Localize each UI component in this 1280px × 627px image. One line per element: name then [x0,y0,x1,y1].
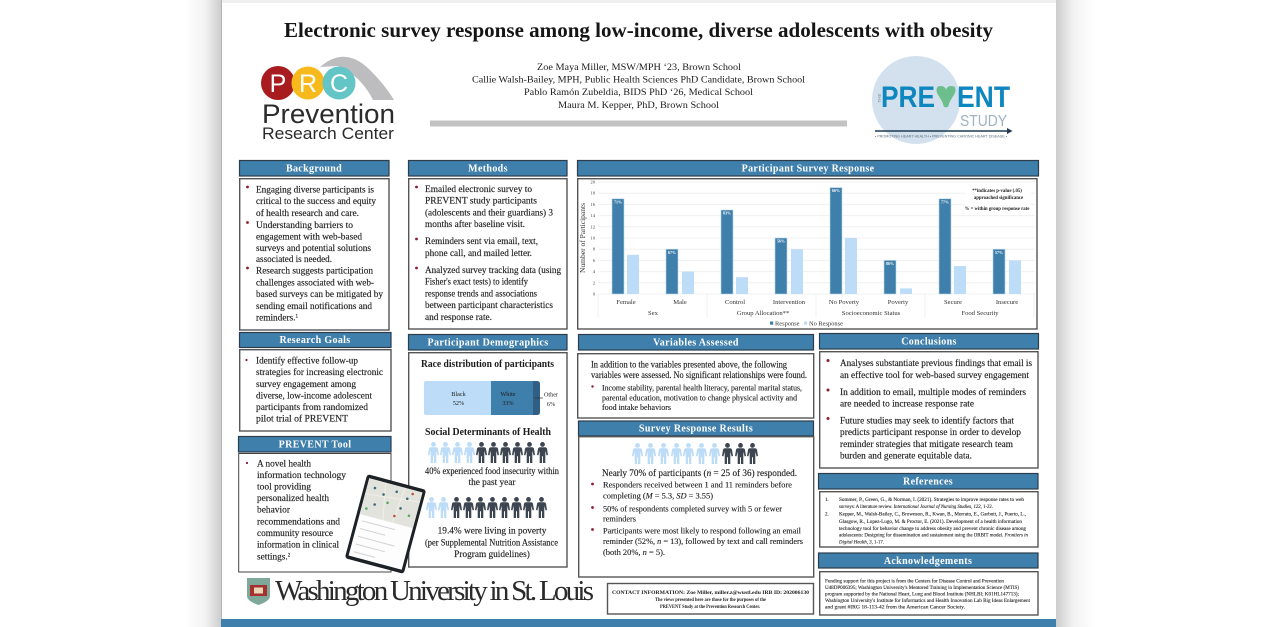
text block: methods bullets: phone call, and mailed letter. [425,249,532,259]
authors: Maura M. Kepper, PhD, Brown School [558,101,719,111]
list: results bullets: completing (M = 5.3, SD = 3.55) [603,490,713,500]
y axis: 4 [593,269,596,274]
legend: No Response [809,320,843,328]
divider bar [430,120,847,126]
text block: acknowledgements: U48DP006395; Washington University's Mentored Training in Implementation Science (MTIS) [825,586,1019,591]
statement: response rate: Nearly 70% of participants (n = 25 of 36) responded. [602,468,797,479]
text block: methods bullets: PREVENT study participants [425,196,537,206]
y axis: 18 [590,191,596,196]
text block: references: surveys: A literature review. International Journal of Nursing Studies, 122, 1-22. [839,505,993,510]
text block: methods bullets: between participant characteristics [425,301,553,311]
heading: variables assessed: Variables Assessed [653,338,739,348]
logo: Washington University in St. Louis: Washington University in St. Louis [275,575,594,607]
bars: response and no response [612,188,1021,294]
text block: PREVENT tool: community resource [257,529,333,539]
text block: background bullets: challenges associated with web- [256,278,374,288]
list: results bullets: reminder (52%, n = 13), followed by text and call reminders [603,536,804,546]
logo: PREVENT Study: V [937,81,955,114]
authors: Callie Walsh-Bailey, MPH, Public Health Sciences PhD Candidate, Brown School [472,76,805,86]
y axis: 14 [590,213,596,218]
text block: conclusions: burden and generate equitable data. [840,452,972,462]
footer band [221,619,1056,627]
legend: Response [775,320,800,328]
authors: Zoe Maya Miller, MSW/MPH ‘23, Brown School [537,63,741,73]
category labels: No Poverty [829,299,860,306]
heading: methods [408,160,567,176]
text block: references: Sommer, P., Green, G., & Norman, I. (2021). Strategies to improve response rates to web [839,498,1025,503]
text block: research goals: participants from randomized [256,402,368,413]
text block: PREVENT tool: information in clinical [257,540,339,550]
panel: survey response results [578,421,814,577]
list: results bullets: (both 20%, n = 5). [603,547,665,557]
text block: PREVENT tool: recommendations and [257,518,340,528]
heading: participant survey response [578,160,1038,176]
panel: PREVENT tool [238,436,391,572]
text block: acknowledgements: Funding support for this project is from the Centers for Disease Control and Prevention [825,580,1004,584]
category labels: Insecure [996,299,1018,306]
text block: methods bullets: response trends and associations [425,290,537,300]
bars: response and no response: 71% [614,200,622,204]
list: results bullets: Participants were most likely to respond following an email [603,526,802,536]
text block: background bullets: of health research and care. [256,208,359,219]
text block: variables assessed [578,354,814,418]
logo: Prevention Research Center: Prevention [262,99,395,129]
heading: background: Background [286,164,342,174]
text block: research goals: Identify effective follow-up [256,356,358,366]
text: poverty: Program guidelines) [454,549,530,560]
stacked bar: race distribution: Other [544,392,558,398]
heading: references: References [903,476,953,488]
logo: PREVENT Study: PRE [881,81,935,114]
results content [579,437,814,577]
heading: methods: Methods [468,164,508,174]
chart note: **indicates p-value (.05) [972,189,1022,194]
text block: background bullets: 1 [296,314,298,320]
y axis: 20 [590,180,596,184]
stacked bar: race distribution: 52% [453,400,464,407]
subheading: race distribution: Race distribution of participants [421,359,554,370]
logo: PREVENT Study [872,56,1012,144]
text block: background bullets: Understanding barriers to [256,221,353,231]
bars: response and no response: 66% [832,188,840,193]
logo: PREVENT Study: STUDY [960,113,1007,130]
text block: references: 1. [825,498,829,503]
stacked bar: race distribution: Black [451,391,467,398]
chart note [965,184,1031,213]
panel: methods [408,160,567,329]
text block: references: Digital Health, 3, 1-17. [838,540,884,546]
text block: references [820,492,1038,547]
panel: conclusions [820,334,1038,468]
bars: response and no response: 83% [723,210,731,216]
logo: Prevention Research Center: P [270,70,286,98]
stacked bar: race distribution: 6% [547,401,555,408]
logo: PREVENT Study: ENT [957,81,1010,114]
text block: methods bullets: and response rate. [425,313,492,323]
bars: response and no response: 77% [941,200,949,204]
category labels: Female [616,299,636,306]
text block: conclusions [820,352,1038,468]
pictogram: poverty [426,497,547,518]
list: results bullets [591,480,804,557]
text block: acknowledgements: Washington University's Institute for Informatics and Health Innovation Lab Big Ideas Enlargement [825,599,1031,604]
category labels: Socioeconomic Status [842,310,901,317]
heading: PREVENT tool [238,436,391,452]
text block: conclusions: predicts participant response in order to develop [840,428,1021,438]
text block: references: Glasgow, R., Lopez-Lugo, M. & Proctor, E. (2021). Development of a health information [839,520,1022,525]
text block: PREVENT tool: 2 [288,554,291,558]
text block: variables assessed: parental education, motivation to change physical activity and [602,394,797,402]
demographics content [409,353,567,567]
authors: Pablo Ramón Zubeldia, BIDS PhD ‘26, Medical School [524,88,753,98]
heading: participant demographics [408,334,567,350]
text block: conclusions: reminder strategies that mitigate research team [840,440,1014,450]
text block: methods bullets: Reminders sent via email, text, [425,237,538,247]
text block: PREVENT tool: information technology [257,470,346,481]
text block: background bullets: surveys and potential solutions [256,244,371,254]
bars: response and no response: 67% [668,250,676,255]
panel: contact information: CONTACT INFORMATION: Zoe Miller, miller.z@wustl.edu IRB ID: 202006130 [612,590,809,596]
title: Electronic survey response among low-income, diverse adolescents with obesity [284,18,993,42]
heading: survey response results [578,421,814,436]
text block: conclusions: an effective tool for web-based survey engagement [840,370,1029,381]
category labels: Male [673,299,687,306]
text block: conclusions: Future studies may seek to identify factors that [840,416,1014,426]
authors [472,63,805,111]
category labels: Sex [648,310,659,317]
stacked bar: race distribution [424,381,558,415]
category labels: Control [725,299,745,306]
text block: methods bullets [409,179,567,329]
text: food insecurity: 40% experienced food insecurity within [425,466,559,477]
y axis: Number of Participants [579,203,587,273]
y axis: 8 [593,247,596,252]
text block: research goals: diverse, low-income adolescent [256,392,372,402]
text block: acknowledgements [820,572,1038,615]
heading: conclusions [820,334,1038,349]
text block: references: 2. [825,512,829,518]
bars: response and no response: 56% [777,238,785,244]
panel: research goals [240,332,391,431]
logo: Prevention Research Center [261,57,395,143]
list: results bullets: reminders [603,514,637,524]
text block: variables assessed: Income stability, parental health literacy, parental marital status, [602,384,802,392]
icon: university shield [247,578,270,605]
heading: PREVENT tool: PREVENT Tool [279,440,351,450]
subheading: social determinants: Social Determinants of Health [425,427,551,438]
panel: acknowledgements [818,553,1038,615]
text block: conclusions: Analyses substantiate previous findings that email is [840,358,1032,369]
text block: background bullets: associated is needed. [256,255,332,265]
text block: variables assessed: food intake behaviors [602,403,671,412]
legend [770,320,843,328]
text block: background bullets: critical to the success and equity [256,197,376,207]
text: poverty: (per Supplemental Nutrition Assistance [425,538,558,548]
heading: variables assessed [578,334,814,350]
panel: contact information [608,584,814,614]
heading: survey response results: Survey Response Results [639,424,753,434]
heading: conclusions: Conclusions [901,336,957,348]
logo: PREVENT Study: THE [877,94,882,102]
y axis: 6 [593,258,596,263]
category labels [616,299,1018,317]
heading: participant survey response: Participant Survey Response [742,164,875,174]
bars: response and no response: 57% [995,250,1003,255]
panel: background [240,160,389,330]
pictogram: food insecurity [428,442,548,463]
y axis: 2 [593,280,596,285]
y axis: 16 [590,202,596,207]
panel: variables assessed [578,334,814,418]
text block: references: Kepper, M., Walsh-Bailey, C., Brownson, R., Kwan, B., Morrato, E., Garbutt, J., Puerto, L., [839,512,1026,518]
text: food insecurity [425,466,559,488]
heading: participant demographics: Participant Demographics [428,338,548,348]
text block: research goals: survey engagement among [256,380,356,390]
stacked bar: race distribution: White [500,391,516,398]
text block: variables assessed: variables were assessed. No significant relationships were found. [591,370,807,381]
text block: research goals [240,350,391,431]
text block: background bullets: Engaging diverse participants is [256,186,374,196]
list: results bullets: 50% of respondents completed survey with 5 or fewer [603,504,782,514]
logo: Prevention Research Center: Research Center [262,124,394,143]
text block: PREVENT tool: tool providing [257,482,311,492]
text block: methods bullets: Analyzed survey tracking data (using [425,265,561,276]
y axis: 10 [590,236,596,240]
text block: background bullets: Research suggests participation [256,266,373,276]
panel: contact information: PREVENT Study at the Prevention Research Center. [660,605,760,610]
text block: PREVENT tool: behavior [257,506,291,516]
text block: acknowledgements: and grant #IRG 18-113-42 from the American Cancer Society. [825,606,965,610]
text block: PREVENT tool: A novel health [257,460,311,470]
heading: background [240,160,389,176]
panel: participant survey response chart [578,160,1038,329]
text block: background bullets: based surveys can be mitigated by [256,290,383,300]
text: poverty: 19.4% were living in poverty [438,526,547,536]
category labels: Group Allocation** [737,310,789,317]
chart note: approached significance [974,196,1023,201]
bars: response and no response: 86% [886,261,894,266]
text block: references: technology tool for behavior change to address obesity and prevent chronic disease among [839,527,1027,532]
pictogram: response rate [632,443,758,464]
poster sheet [185,0,1096,627]
bar chart: response by characteristic [578,179,1037,329]
text block: methods bullets: Fisher's exact tests) to identify [425,276,528,288]
heading: research goals [240,332,391,348]
text block: methods bullets: (adolescents and their guardians) 3 [425,208,553,218]
text block: PREVENT tool [239,454,391,572]
heading: references [818,474,1038,489]
text block: research goals: strategies for increasing electronic [256,367,383,378]
logo: PREVENT Study: • PROMOTING HEART HEALTH • PREVENTING CHRONIC HEART DISEASE • [875,134,1008,138]
text block: background bullets [240,179,389,330]
heading: research goals: Research Goals [279,335,351,346]
list: results bullets: Responders received between 1 and 11 reminders before [603,480,792,490]
panel: references [818,474,1038,547]
logo: Prevention Research Center: R [299,70,317,98]
y axis: 0 [593,292,596,296]
category labels: Secure [944,299,962,306]
chart note: % = within group response rate [965,207,1029,212]
text block: conclusions: In addition to email, multiple modes of reminders [840,387,1026,398]
panel: contact information: The views presented here are those for the purposes of the [655,598,766,603]
text block: background bullets: sending email notifications and [256,301,372,312]
heading: acknowledgements: Acknowledgements [884,556,972,567]
heading: acknowledgements [818,553,1038,568]
text block: acknowledgements: program supported by the National Heart, Lung and Blood Institute (NHLBI; K01HL147713); [825,592,1019,598]
text: food insecurity: the past year [469,478,516,488]
icon: tablet showing resource map [345,474,426,574]
text block: methods bullets: Emailed electronic survey to [425,185,532,195]
text block: PREVENT tool: settings. [257,552,288,562]
text block: conclusions: are needed to increase response rate [840,400,974,410]
category labels: Poverty [888,299,909,306]
text block: background bullets: engagement with web-based [256,232,362,242]
text block: variables assessed: In addition to the variables presented above, the following [591,360,787,370]
text block: methods bullets: months after baseline visit. [425,219,525,230]
text block: references: adolescents: Designing for dissemination and sustainment using the ORBIT model. Frontiers in [839,534,1028,538]
category labels: Intervention [773,299,806,306]
y axis [579,180,596,296]
text block: PREVENT tool: personalized health [257,494,329,504]
logo: Prevention Research Center: C [330,70,348,98]
category labels: Food Security [961,310,999,317]
text: poverty [425,526,558,560]
text block: background bullets: reminders. [256,314,296,324]
text block: research goals: pilot trial of PREVENT [256,414,348,424]
panel: participant demographics [408,334,567,567]
stacked bar: race distribution: 33% [502,400,514,407]
y axis: 12 [590,224,596,229]
